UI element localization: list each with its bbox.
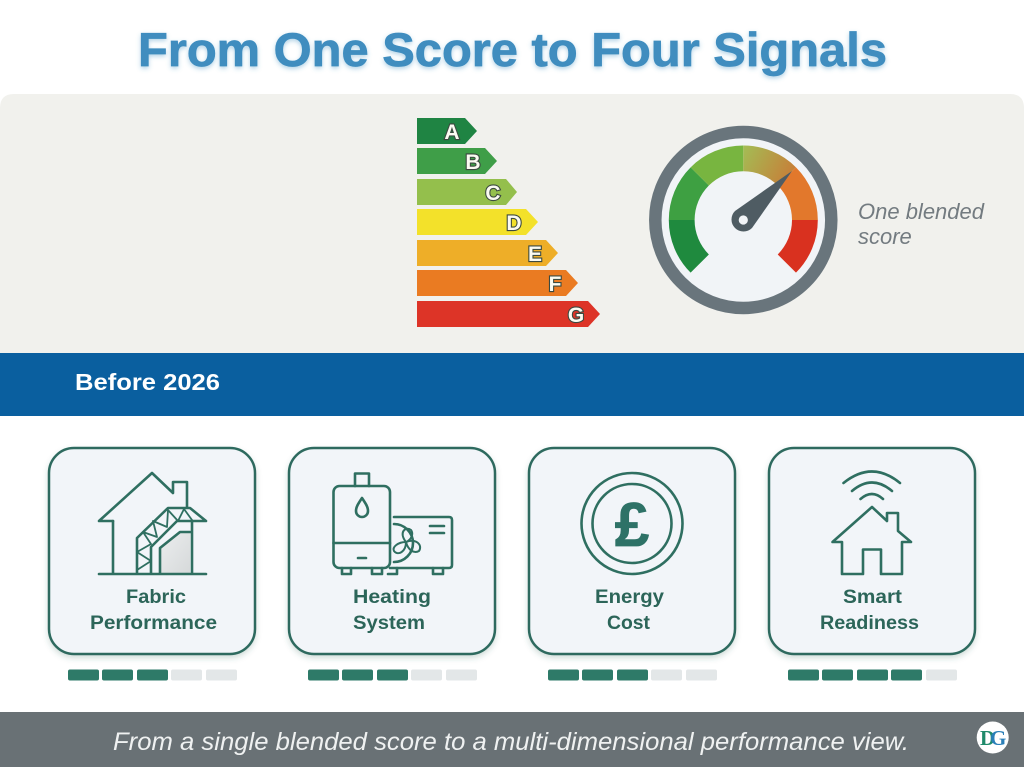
- icon: DG logo: [977, 722, 1009, 754]
- icon: boiler and heat pump: [334, 474, 452, 574]
- needle: [731, 171, 792, 232]
- gauge caption: One blended: [858, 199, 985, 224]
- icon: smart home with wifi: [832, 472, 911, 574]
- title: From One Score to Four Signals: [138, 23, 887, 76]
- icon: pound coin: [582, 473, 682, 574]
- panel: smart readiness: [769, 448, 975, 654]
- band: before 2026: Before 2026: [75, 369, 220, 395]
- footer bar: [0, 712, 1024, 767]
- card label: Fabric: [126, 586, 186, 608]
- panel: heating system: [289, 448, 495, 654]
- card label: [90, 586, 217, 634]
- card label: Energy: [595, 586, 664, 608]
- icon: DG logo: D: [980, 726, 995, 750]
- card label: [820, 586, 919, 634]
- energy rating bars: E: [528, 243, 542, 266]
- rating bar: heating 3 of 5: [308, 670, 477, 680]
- footer bar: From a single blended score to a multi-dimensional performance view.: [113, 728, 909, 756]
- panel: fabric performance: [49, 448, 255, 654]
- panel: energy cost: [529, 448, 735, 654]
- rating bar: cost 3 of 5: [548, 670, 717, 680]
- card label: Performance: [90, 612, 217, 634]
- card label: Readiness: [820, 612, 919, 634]
- rating bar: fabric 3 of 5: [68, 670, 237, 680]
- card label: Cost: [607, 612, 650, 634]
- energy rating bars: G: [568, 304, 584, 327]
- card label: [353, 586, 431, 634]
- icon: DG logo: G: [990, 726, 1006, 750]
- energy rating bars: B: [465, 151, 481, 174]
- icon: insulated house: [99, 473, 206, 574]
- energy rating bars: A: [444, 121, 460, 144]
- card label: [595, 586, 664, 634]
- energy rating bars: C: [485, 182, 501, 205]
- card label: System: [353, 612, 425, 634]
- energy rating bars: [417, 118, 600, 327]
- panel: before 2026: [0, 94, 1024, 353]
- energy rating bars: D: [506, 212, 522, 235]
- energy rating bars: F: [549, 273, 562, 296]
- gauge: [655, 132, 831, 308]
- gauge caption: score: [858, 224, 912, 249]
- card label: Smart: [843, 586, 903, 608]
- icon: pound coin: £: [615, 491, 649, 560]
- band: before 2026: [0, 353, 1024, 416]
- card label: Heating: [353, 586, 431, 608]
- rating bar: smart 4 of 5: [788, 670, 957, 680]
